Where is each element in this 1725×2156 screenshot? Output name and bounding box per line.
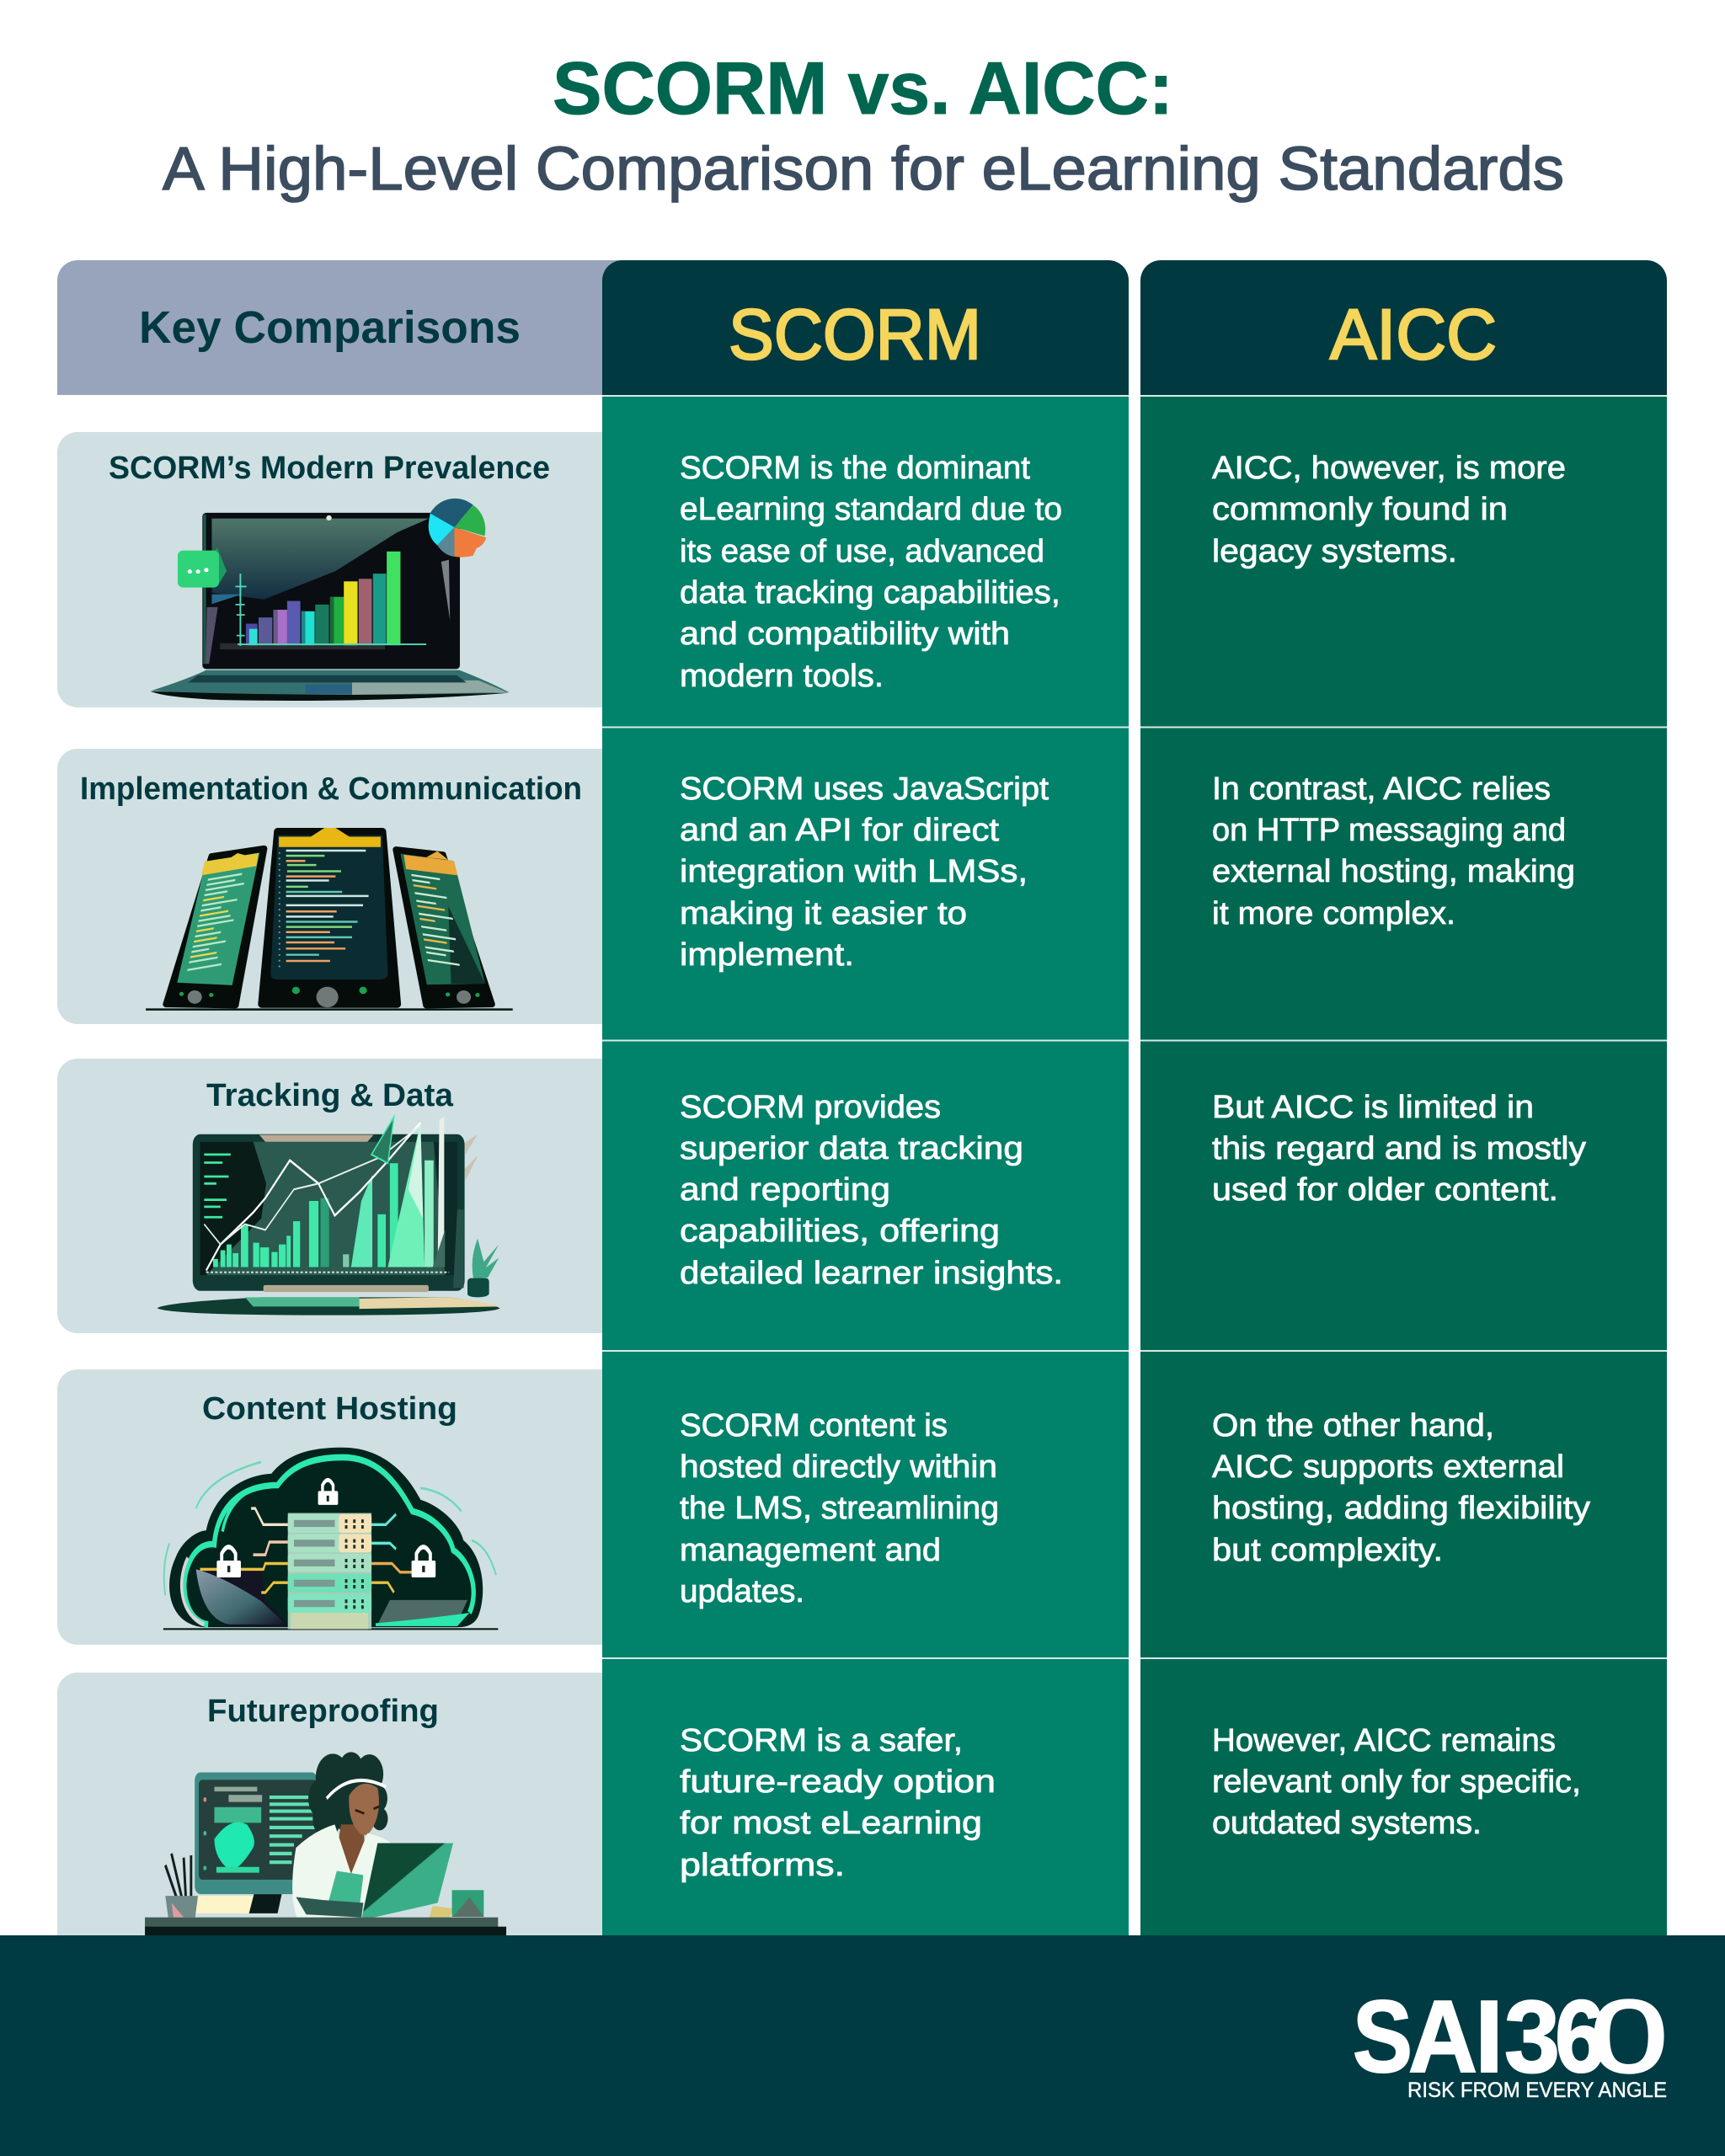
text: SCORM hosting: updates. (680, 1574, 804, 1609)
footer band (0, 1935, 1725, 2156)
text: AICC tracking: used for older content. (1212, 1172, 1558, 1208)
icon: cloud with server and locks (163, 1448, 498, 1629)
text: AICC tracking: this regard and is mostly (1212, 1131, 1586, 1166)
icon: laptop with bar chart and pie (150, 499, 510, 701)
logo: SAI360 (1353, 1979, 1668, 2102)
text: AICC hosting: On the other hand, (1212, 1408, 1494, 1444)
icon: lock right (412, 1547, 435, 1577)
text: SCORM tracking: superior data tracking (680, 1131, 1023, 1166)
text: SCORM futureproofing: future-ready option (680, 1764, 996, 1800)
text: SCORM hosting: management and (680, 1533, 941, 1568)
text: SCORM implementation: and an API for direct (680, 813, 999, 848)
panel: futureproofing: Futureproofing (207, 1694, 439, 1729)
text: AICC implementation (1212, 771, 1575, 931)
text: SCORM futureproofing: platforms. (680, 1848, 845, 1883)
panel: tracking and data (57, 1059, 602, 1333)
title block (163, 46, 1564, 203)
text: AICC prevalence: legacy systems. (1212, 534, 1457, 569)
text: AICC prevalence (1212, 451, 1566, 569)
text: AICC implementation: it more complex. (1212, 896, 1455, 931)
icon: three phones with code (146, 828, 513, 1010)
text: AICC tracking (1212, 1090, 1586, 1208)
text: SCORM implementation: implement. (680, 937, 854, 973)
logo: SAI360: I (1475, 1979, 1503, 2094)
text: SCORM futureproofing (680, 1723, 996, 1883)
text: SCORM hosting (680, 1408, 999, 1609)
logo: SAI360: 0 (1590, 1979, 1668, 2094)
column: AICC (1140, 260, 1667, 1935)
header: key comparisons (57, 260, 628, 395)
text: SCORM hosting: the LMS, streamlining (680, 1491, 999, 1526)
panel: implementation and communication (57, 749, 602, 1024)
logo: SAI360: S (1353, 1979, 1413, 2094)
text: SCORM futureproofing: for most eLearning (680, 1806, 982, 1841)
logo: SAI360: 3 (1504, 1979, 1560, 2094)
logo: SAI360: 6 (1555, 1979, 1605, 2094)
text: SCORM prevalence: modern tools. (680, 659, 884, 694)
text: SCORM implementation: integration with LMSs, (680, 854, 1028, 889)
text: SCORM implementation: making it easier to (680, 896, 967, 931)
hair (308, 1752, 387, 1838)
text: AICC hosting (1212, 1408, 1590, 1568)
panel: SCORM's modern prevalence: SCORM’s Modern Prevalence (109, 451, 550, 486)
text: AICC futureproofing (1212, 1723, 1581, 1841)
icon: desktop monitor with line and bar chart (158, 1117, 500, 1315)
subtitle: A High-Level Comparison for eLearning Standards (163, 136, 1564, 203)
text: SCORM futureproofing: SCORM is a safer, (680, 1723, 963, 1758)
panel: content hosting (57, 1369, 602, 1645)
text: SCORM hosting: SCORM content is (680, 1408, 948, 1444)
text: SCORM tracking: detailed learner insights. (680, 1256, 1063, 1291)
text: SCORM prevalence: and compatibility with (680, 616, 1010, 652)
text: AICC implementation: on HTTP messaging and (1212, 813, 1566, 848)
header: key comparisons: Key Comparisons (139, 302, 521, 353)
heading: AICC: AICC (1330, 295, 1497, 374)
text: SCORM tracking: and reporting (680, 1172, 890, 1208)
text: SCORM hosting: hosted directly within (680, 1449, 997, 1485)
text: SCORM implementation: SCORM uses JavaScript (680, 771, 1049, 807)
panel: implementation and communication: Implementation & Communication (80, 771, 582, 807)
text: AICC futureproofing: However, AICC remains (1212, 1723, 1556, 1758)
text: SCORM implementation (680, 771, 1049, 973)
text: AICC futureproofing: outdated systems. (1212, 1806, 1482, 1841)
title: SCORM vs. AICC: (553, 46, 1173, 130)
text: SCORM prevalence: its ease of use, advanced (680, 534, 1044, 569)
text: SCORM tracking: SCORM provides (680, 1090, 941, 1125)
panel: tracking and data: Tracking & Data (206, 1078, 454, 1113)
tagline: RISK FROM EVERY ANGLE (1407, 2079, 1667, 2102)
text: SCORM prevalence (680, 451, 1062, 694)
text: AICC hosting: AICC supports external (1212, 1449, 1564, 1485)
icon: woman at desk with monitor and laptop (145, 1752, 506, 1936)
text: AICC futureproofing: relevant only for specific, (1212, 1764, 1581, 1800)
text: AICC hosting: but complexity. (1212, 1533, 1443, 1568)
text: AICC tracking: But AICC is limited in (1212, 1090, 1534, 1125)
text: SCORM tracking (680, 1090, 1063, 1291)
column: SCORM (602, 260, 1129, 1935)
text: AICC prevalence: AICC, however, is more (1212, 451, 1566, 486)
text: SCORM prevalence: data tracking capabilities, (680, 575, 1060, 611)
logo: SAI360: A (1408, 1979, 1477, 2094)
panel: futureproofing (57, 1673, 602, 1936)
text: AICC prevalence: commonly found in (1212, 492, 1508, 527)
icon: lock left (216, 1547, 241, 1577)
text: SCORM prevalence: SCORM is the dominant (680, 451, 1030, 486)
text: AICC hosting: hosting, adding flexibility (1212, 1491, 1590, 1526)
panel: SCORM's modern prevalence (57, 432, 602, 707)
text: AICC implementation: In contrast, AICC relies (1212, 771, 1551, 807)
text: SCORM tracking: capabilities, offering (680, 1214, 1000, 1249)
text: SCORM prevalence: eLearning standard due to (680, 492, 1062, 527)
panel: content hosting: Content Hosting (202, 1391, 457, 1427)
text: AICC implementation: external hosting, making (1212, 854, 1575, 889)
heading: SCORM: SCORM (729, 295, 981, 374)
icon: lock top (318, 1480, 338, 1505)
